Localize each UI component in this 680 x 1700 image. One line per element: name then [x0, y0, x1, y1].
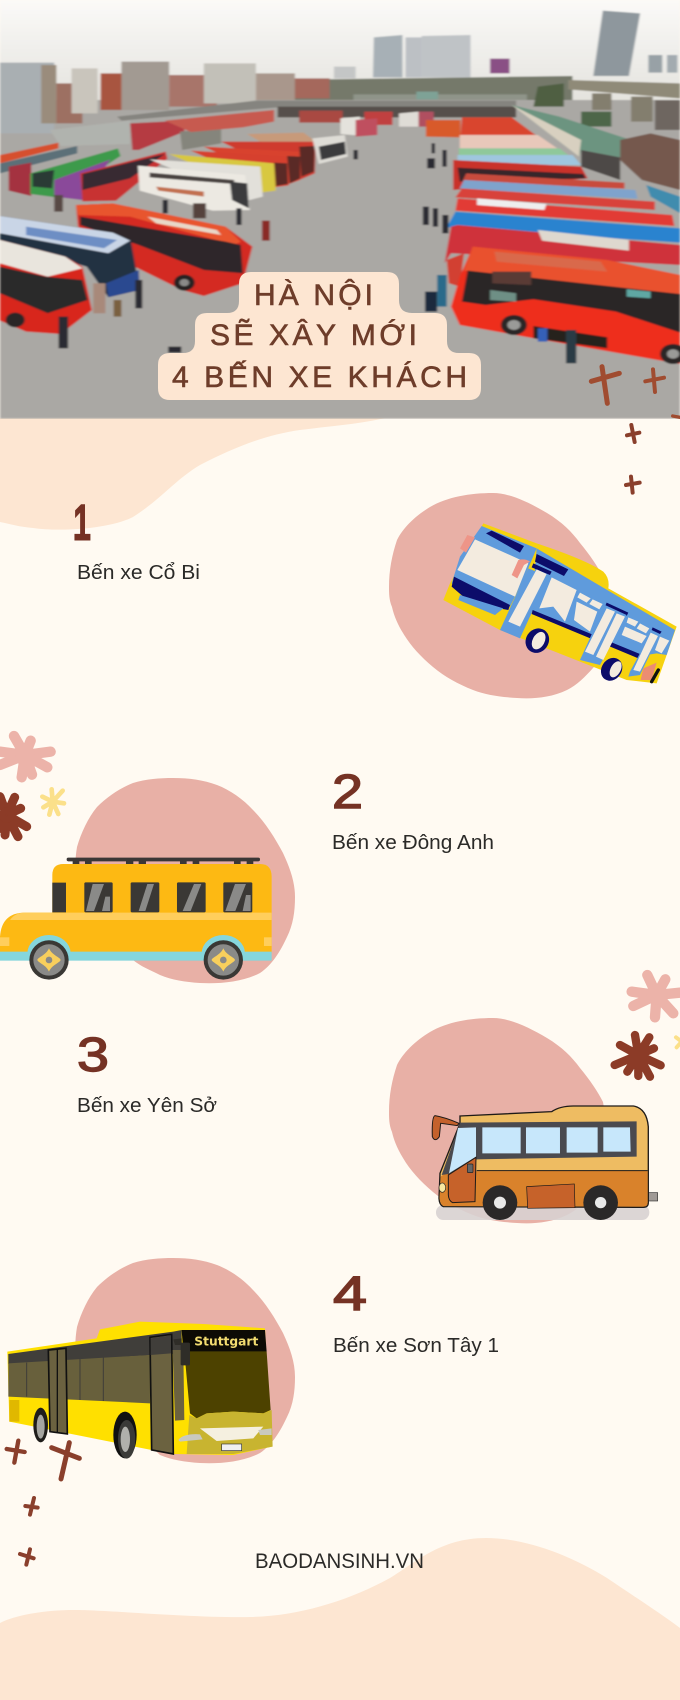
item 2: number: 2: [332, 766, 363, 819]
title: SẼ XÂY MỚI: [210, 318, 417, 352]
item 3: pink blob: [389, 1018, 612, 1223]
item 3: label: Bến xe Yên Sở: [77, 1095, 217, 1117]
title background pill: [158, 272, 481, 400]
decoration: flowers right: [615, 975, 680, 1077]
item 1: pink blob: [389, 493, 612, 698]
item 1: label: Bến xe Cổ Bi: [77, 562, 200, 584]
title: 4 BẾN XE KHÁCH: [172, 360, 467, 394]
hero photo: bus station: [0, 0, 680, 419]
decorative peach wave: bottom: [0, 1538, 680, 1700]
icon: tilted city bus: [443, 523, 677, 685]
item 1: number: 1: [73, 497, 91, 550]
item 4: pink blob: [75, 1258, 295, 1463]
crosses: bottom left: [7, 1441, 79, 1565]
photo decoration: crosses: [591, 367, 680, 417]
item 4: number: 4: [333, 1268, 367, 1321]
decorative peach wave: top: [0, 418, 385, 530]
decoration: flowers left: [0, 736, 64, 837]
item 2: pink blob: [75, 778, 295, 983]
icon: yellow Stuttgart bus: [7, 1322, 273, 1459]
icon: yellow school bus: [0, 858, 272, 980]
icon: yellow Stuttgart bus: Stuttgart: [194, 1335, 259, 1349]
item 2: label: Bến xe Đông Anh: [332, 832, 494, 854]
icon: orange coach: [432, 1106, 658, 1220]
footer: source: BAODANSINH.VN: [255, 1550, 424, 1573]
crosses: top right: [626, 425, 640, 493]
title: HÀ NỘI: [254, 278, 373, 312]
title: [158, 272, 481, 400]
item 4: label: Bến xe Sơn Tây 1: [333, 1335, 499, 1357]
item 3: number: 3: [77, 1029, 109, 1082]
